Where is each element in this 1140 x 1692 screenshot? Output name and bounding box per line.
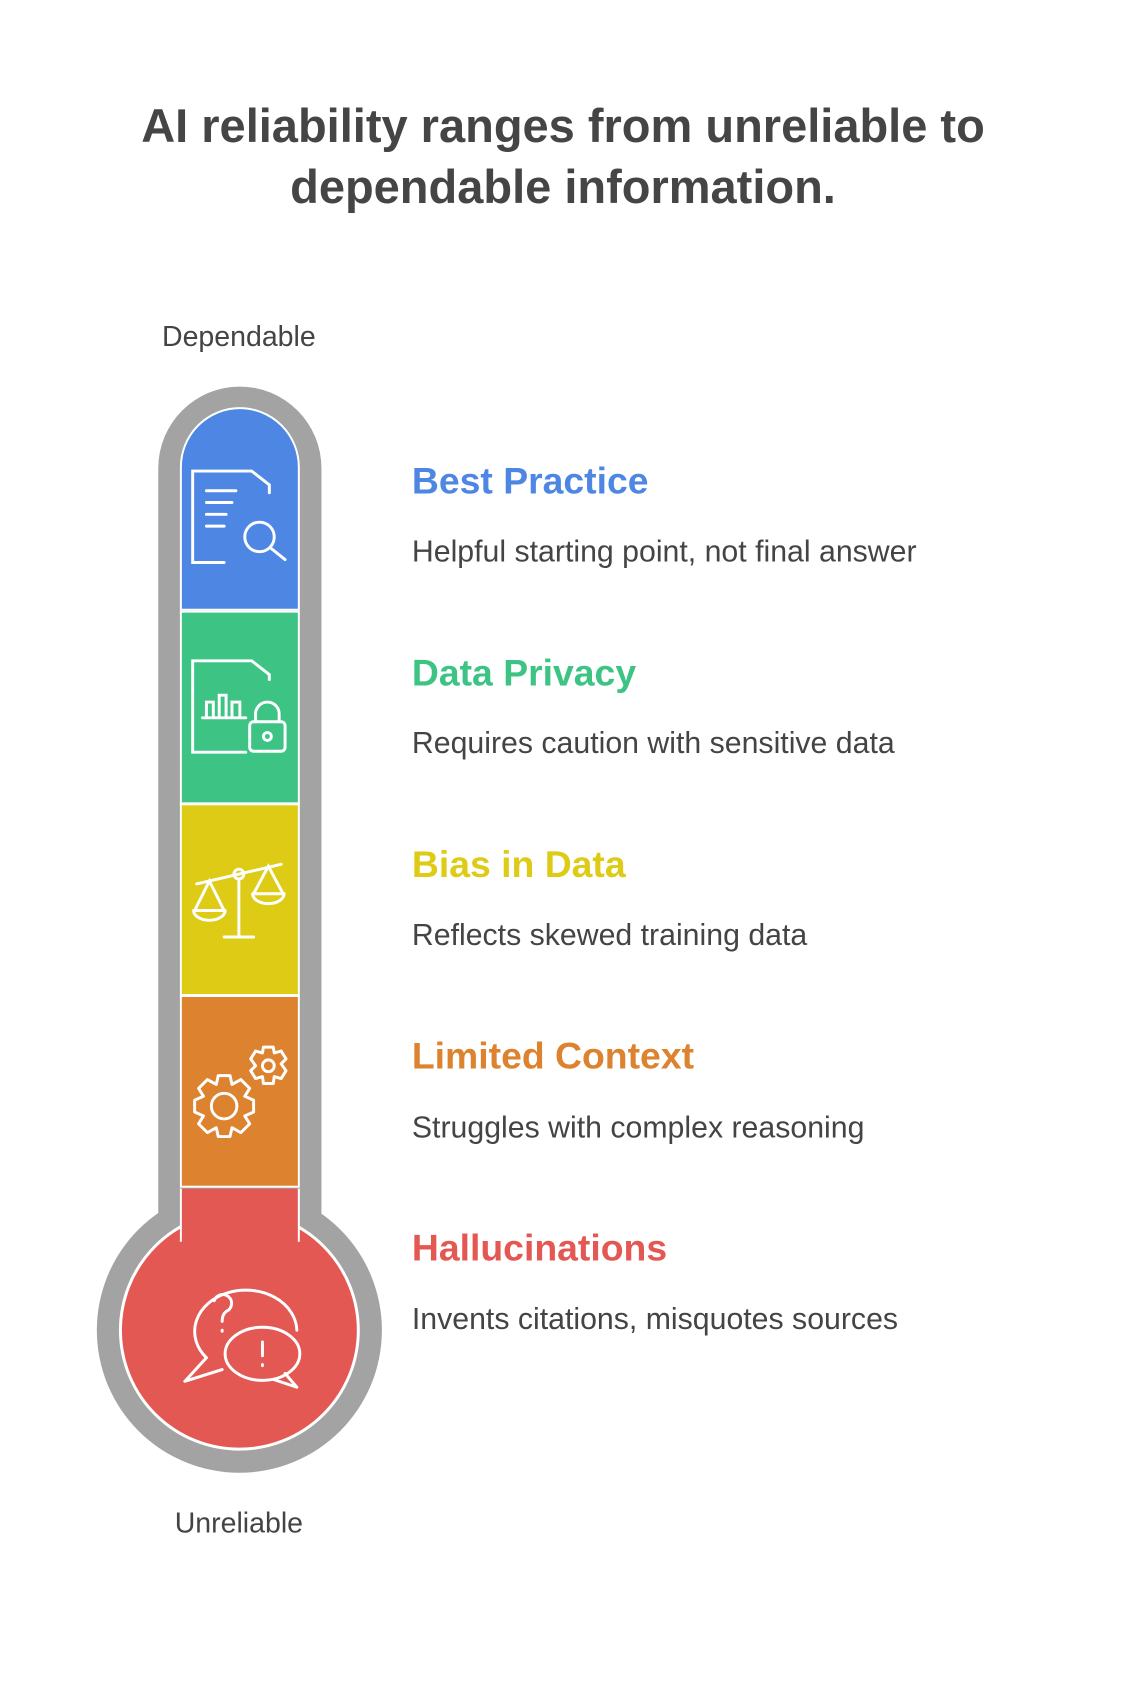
item: hallucinations: Hallucinations bbox=[412, 1226, 667, 1268]
label: dependable: Dependable bbox=[162, 321, 316, 353]
item: limited context: Limited Context bbox=[412, 1035, 694, 1077]
item: best practice bbox=[412, 460, 917, 569]
label: unreliable: Unreliable bbox=[175, 1508, 303, 1540]
segment: data privacy bbox=[181, 612, 299, 803]
item: bias in data bbox=[412, 843, 807, 952]
segment: limited context bbox=[181, 996, 299, 1187]
item: data privacy: Requires caution with sensitive data bbox=[412, 727, 895, 760]
icon: document search bbox=[193, 471, 285, 562]
item: bias in data: Reflects skewed training data bbox=[412, 919, 807, 952]
item: limited context bbox=[412, 1035, 864, 1145]
title: dependable information. bbox=[290, 160, 836, 213]
icon: data lock bbox=[193, 661, 285, 752]
item: limited context: Struggles with complex reasoning bbox=[412, 1112, 864, 1145]
item: data privacy: Data Privacy bbox=[412, 651, 636, 693]
item: best practice: Helpful starting point, not final answer bbox=[412, 536, 917, 569]
item: bias in data: Bias in Data bbox=[412, 843, 626, 885]
main content bbox=[97, 321, 917, 1540]
icon: speech bubbles bbox=[185, 1290, 300, 1387]
segment: bias bbox=[181, 804, 299, 995]
bulb: hallucinations bbox=[120, 1189, 358, 1449]
title bbox=[141, 99, 985, 213]
segment: best practice bbox=[181, 408, 299, 610]
title: AI reliability ranges from unreliable to bbox=[141, 99, 985, 152]
item: hallucinations bbox=[412, 1226, 898, 1336]
item: best practice: Best Practice bbox=[412, 460, 649, 502]
item: data privacy bbox=[412, 651, 895, 760]
item: hallucinations: Invents citations, misquotes sources bbox=[412, 1303, 898, 1336]
thermometer bbox=[97, 387, 382, 1473]
icon: gears bbox=[195, 1047, 286, 1137]
icon: scales bbox=[194, 864, 284, 937]
thermometer outer tube bbox=[97, 387, 382, 1473]
